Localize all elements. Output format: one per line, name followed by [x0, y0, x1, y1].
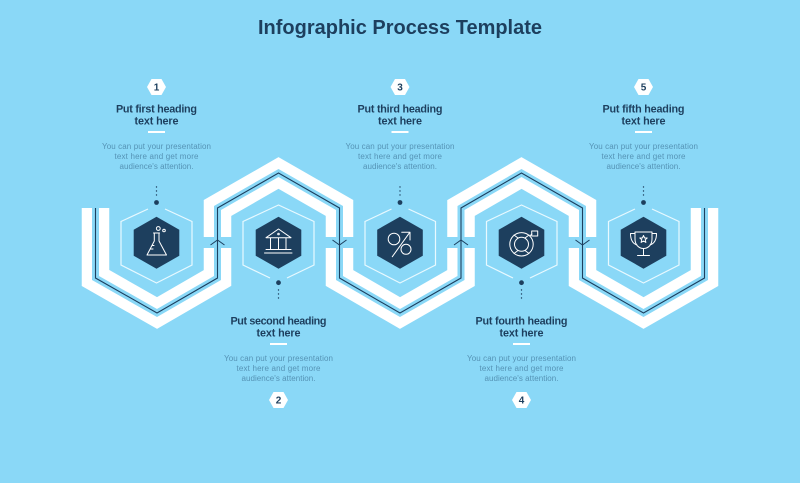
body text 1: You can put your presentation [102, 142, 211, 151]
heading 4: text here [500, 328, 544, 340]
body text 1 [102, 142, 211, 171]
dark hexagon 5 [621, 217, 666, 269]
underline 3 [392, 131, 408, 133]
underline 1 [148, 131, 165, 133]
number badge 3 [390, 79, 410, 95]
title: Infographic Process Template [258, 17, 542, 39]
body text 3: text here and get more [358, 152, 443, 161]
icon: percent arrow [388, 232, 411, 257]
heading 1: Put first heading [116, 104, 197, 116]
number badge 4 [512, 392, 531, 408]
body text 4 [467, 354, 576, 383]
hexagon outline 1 [121, 209, 192, 283]
dark hexagon 2 [256, 217, 301, 269]
body text 5 [589, 142, 698, 171]
step 3 [346, 79, 454, 283]
body text 3: audience's attention. [363, 162, 437, 171]
icon: trophy [630, 232, 656, 256]
heading 2 [230, 316, 326, 340]
number badge 2: 2 [276, 396, 282, 406]
body text 4: You can put your presentation [467, 354, 576, 363]
body text 5: You can put your presentation [589, 142, 698, 151]
step 5 [589, 79, 698, 283]
hexagon outline 4 [486, 205, 557, 278]
connector dots 3 [398, 186, 402, 205]
body text 5: audience's attention. [606, 162, 680, 171]
number badge 3: 3 [397, 82, 403, 94]
hexagon outline 5 [608, 209, 679, 283]
dark hexagon 4 [499, 217, 544, 269]
arrow: down 2 [576, 240, 590, 245]
underline 5 [635, 131, 652, 133]
hexagon outline 2 [243, 205, 314, 278]
zigzag process ribbon [96, 173, 704, 313]
dark hexagon 1 [134, 217, 179, 269]
heading 4: Put fourth heading [476, 316, 568, 328]
heading 3: Put third heading [358, 104, 442, 116]
underline 4 [513, 343, 530, 345]
dark hexagon 3 [377, 217, 423, 269]
body text 3: You can put your presentation [346, 142, 454, 151]
heading 2: text here [256, 328, 300, 340]
number badge 1 [147, 79, 166, 95]
arrow: up 1 [210, 240, 224, 245]
heading 5: text here [622, 116, 666, 128]
heading 3: text here [378, 116, 422, 128]
number badge 5 [634, 79, 653, 95]
heading 4 [476, 316, 568, 340]
hexagon outline 3 [365, 209, 436, 283]
body text 2: audience's attention. [242, 374, 316, 383]
arrow: down 1 [332, 240, 346, 245]
heading 5: Put fifth heading [602, 104, 684, 116]
heading 5 [602, 104, 684, 128]
connector dots 2 [276, 280, 281, 299]
heading 3 [358, 104, 442, 128]
body text 2 [224, 354, 333, 383]
icon: flask [147, 227, 166, 255]
heading 1 [116, 104, 197, 128]
heading 1: text here [134, 116, 178, 128]
number badge 2 [269, 392, 288, 408]
connector dots 5 [641, 186, 646, 205]
arrow: up 2 [454, 240, 468, 245]
underline 2 [270, 343, 287, 345]
body text 4: audience's attention. [484, 374, 558, 383]
number badge 1: 1 [154, 82, 160, 94]
step 2 [224, 205, 333, 408]
step 1 [102, 79, 211, 283]
body text 5: text here and get more [602, 152, 686, 161]
body text 2: You can put your presentation [224, 354, 333, 363]
number badge 4: 4 [519, 396, 525, 406]
body text 3 [346, 142, 454, 171]
connector dots 4 [519, 280, 524, 299]
body text 1: audience's attention. [120, 162, 194, 171]
body text 4: text here and get more [480, 364, 564, 373]
icon: bank [264, 229, 292, 253]
body text 1: text here and get more [114, 152, 199, 161]
step 4 [467, 205, 576, 408]
body text 2: text here and get more [236, 364, 321, 373]
connector dots 1 [154, 186, 159, 205]
number badge 5: 5 [641, 82, 647, 94]
icon: target with flag [510, 231, 538, 256]
heading 2: Put second heading [230, 316, 326, 328]
